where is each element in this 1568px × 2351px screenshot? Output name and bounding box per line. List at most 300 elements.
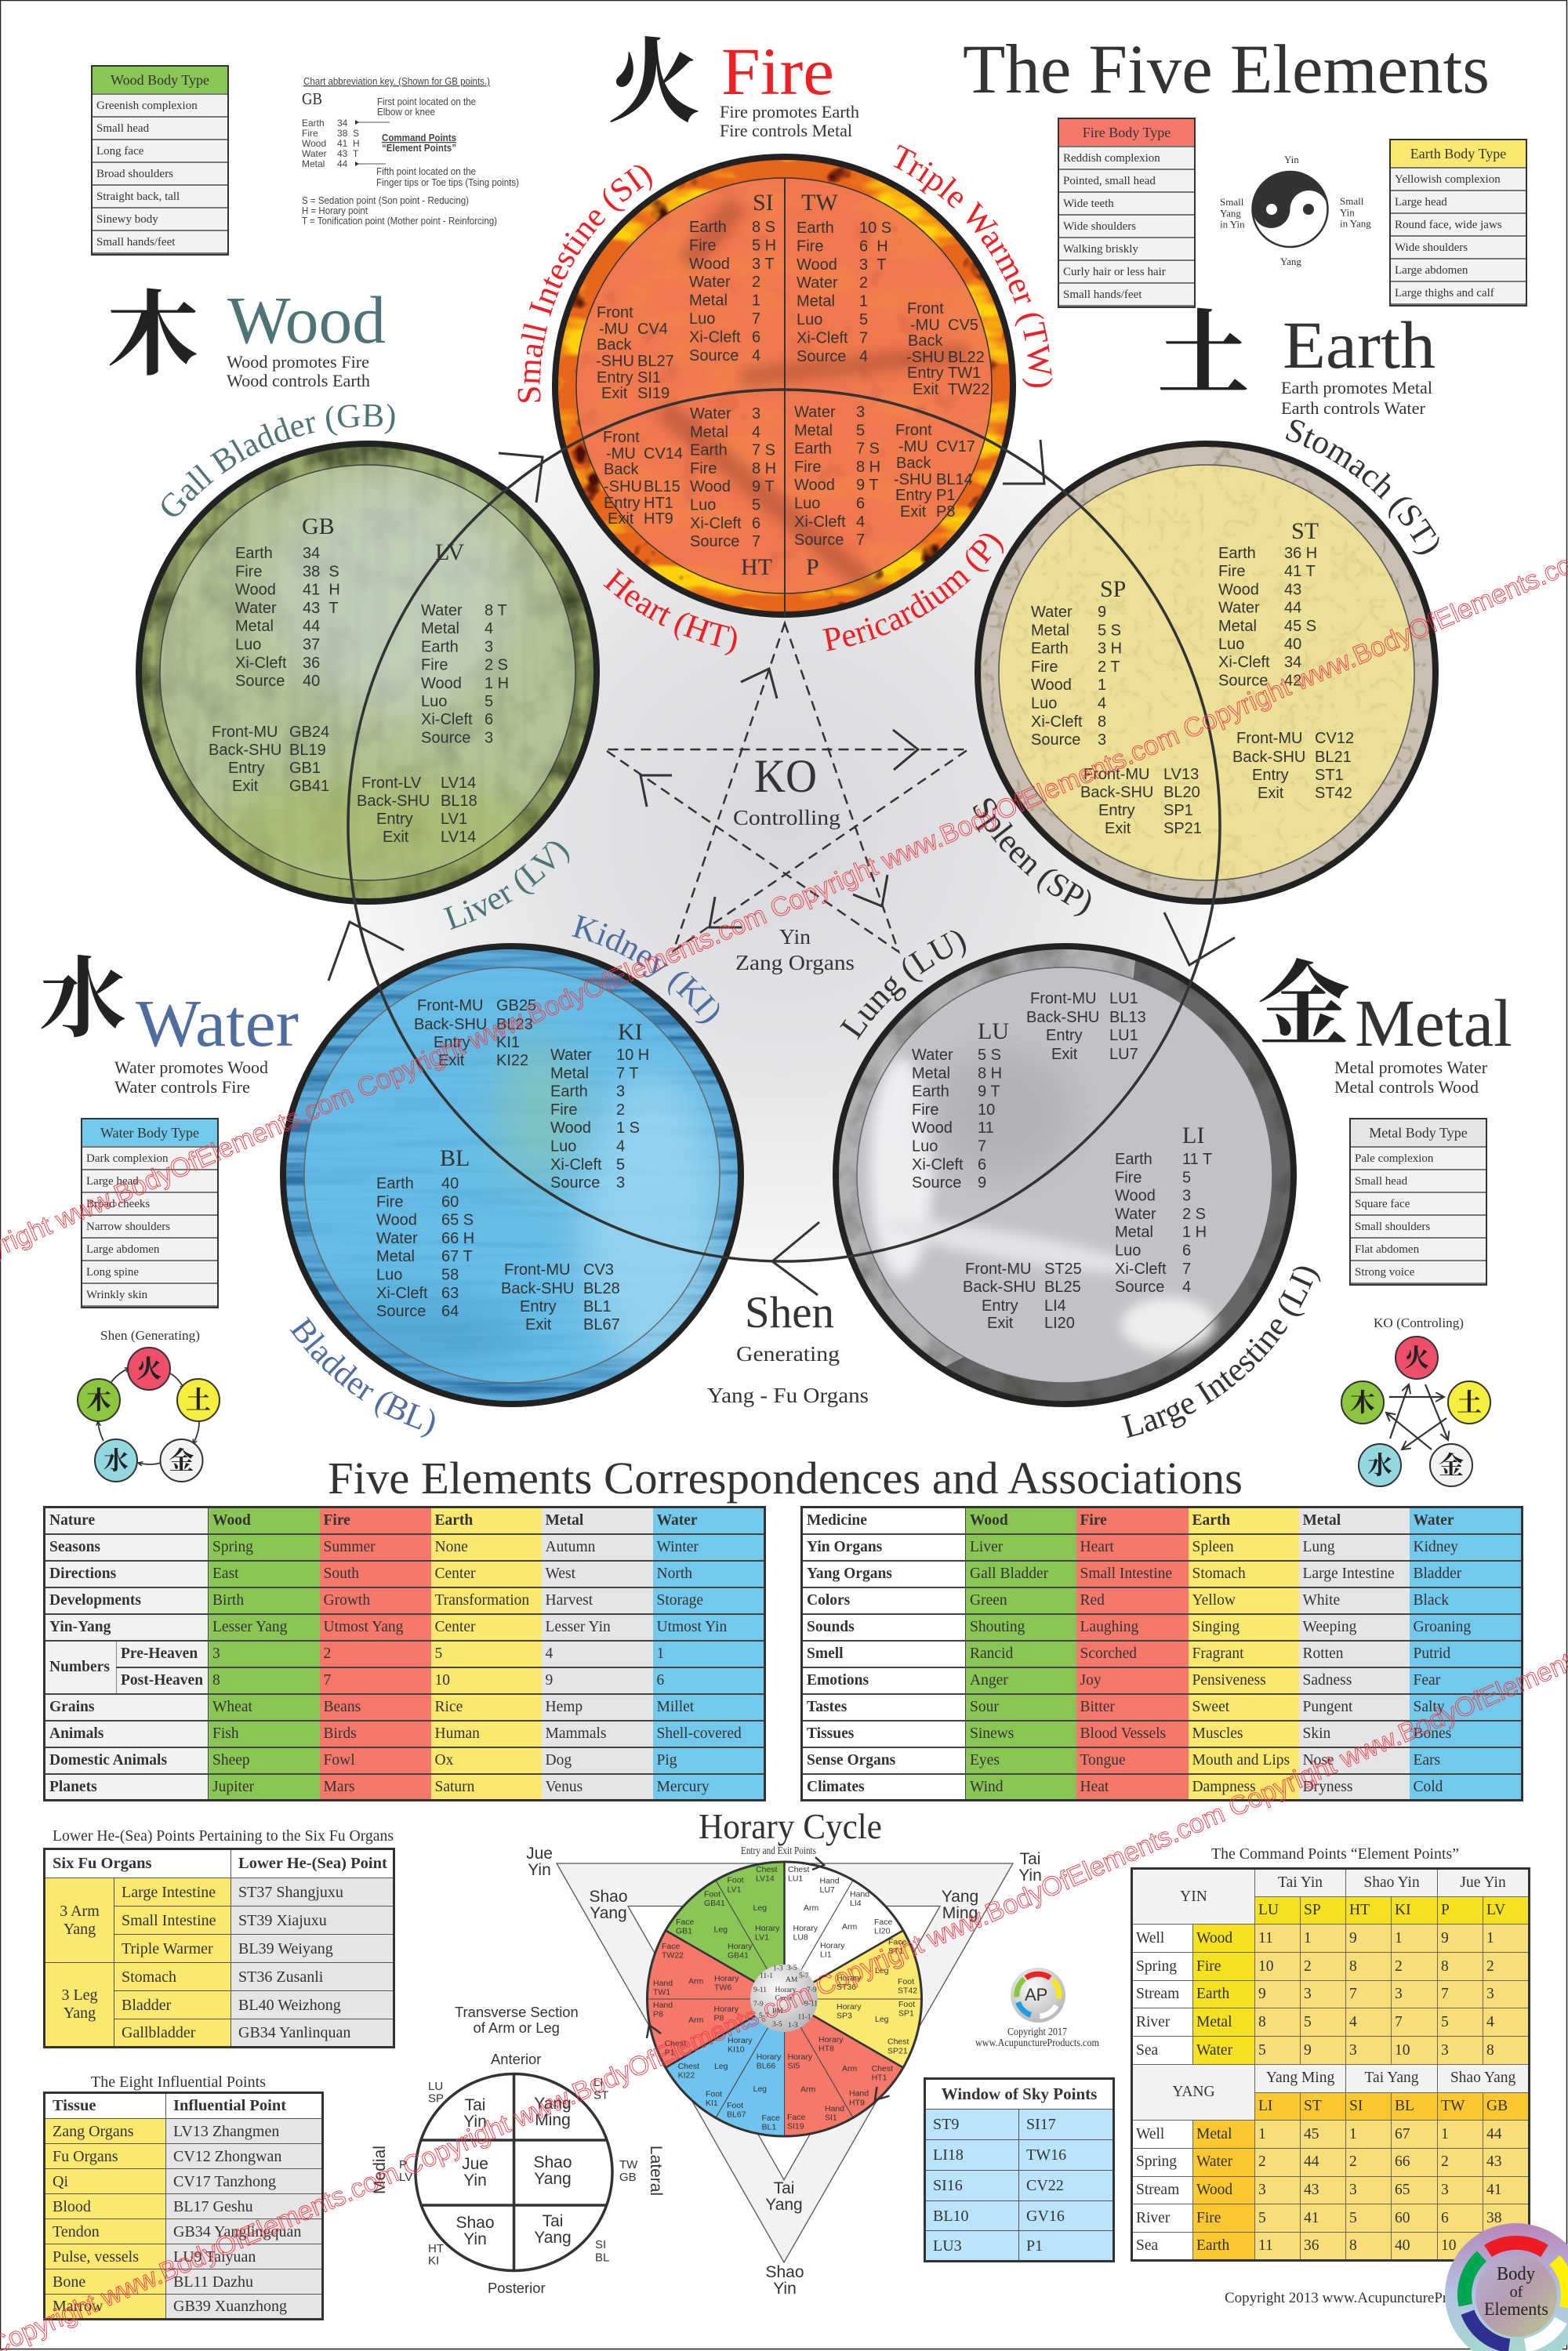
diagram: horary cycle wheel and triangles: Foot: [898, 1977, 914, 1986]
panel: Fire circle (SI, TW, HT, P): Entry: [895, 487, 932, 504]
panel: Water circle (KI, BL): Source: [376, 1303, 426, 1320]
panel: Wood circle (GB, LV): BL19: [289, 742, 326, 759]
panel: Wood circle (GB, LV): Exit: [383, 829, 409, 846]
diagram: horary cycle wheel and triangles: Ming: [942, 1904, 978, 1922]
table: medicine correspondences: Skin: [1303, 1725, 1330, 1742]
table: medicine correspondences: Shouting: [970, 1619, 1025, 1635]
table: medicine correspondences: Eyes: [970, 1752, 1000, 1769]
panel: Metal body type: [1349, 1118, 1487, 1286]
chart abbreviation key: Finger tips or Toe tips (Tsing points): [376, 176, 519, 188]
table: eight influential points: [43, 2092, 324, 2320]
panel: Fire circle (SI, TW, HT, P): Wood: [690, 478, 731, 495]
table: eight influential points: Blood: [53, 2198, 91, 2215]
panel: Water circle (KI, BL): Front-MU: [504, 1261, 570, 1279]
diagram: horary cycle wheel and triangles: BL66: [757, 2062, 775, 2071]
panel: Wood circle (GB, LV): Earth: [421, 638, 459, 655]
panel: Metal circle (LU, LI): Source: [1115, 1279, 1164, 1296]
table: eight influential points: BL17 Geshu: [173, 2198, 253, 2215]
table: nature correspondences: 9: [546, 1672, 553, 1689]
panel: Wood circle (GB, LV): Front-LV: [361, 775, 421, 792]
panel: Wood circle (GB, LV): Xi-Cleft: [235, 655, 287, 672]
panel: Earth circle (ST, SP): Front-MU: [1236, 730, 1302, 747]
table: medicine correspondences: Lung: [1303, 1539, 1335, 1555]
diagram: transverse section of arm or leg: Shao: [533, 2153, 572, 2171]
panel: Wood circle (GB, LV): Metal: [421, 620, 459, 637]
diagram: horary cycle wheel and triangles: Face: [662, 1942, 680, 1951]
diagram: horary cycle wheel and triangles: Horary: [714, 1974, 739, 1983]
panel: Metal circle (LU, LI): Back-SHU: [1026, 1009, 1099, 1026]
curved organ labels: Kidney (KI): [572, 915, 720, 1024]
panel: Earth circle (ST, SP): 42: [1284, 672, 1301, 689]
diagram: horary cycle wheel and triangles: Face: [888, 1938, 906, 1947]
table: medicine correspondences: Wood: [970, 1512, 1008, 1529]
table: medicine correspondences: Red: [1080, 1592, 1105, 1609]
curved organ labels: Small Intestine (SI): [517, 165, 652, 402]
table: command points: 2: [1349, 2153, 1357, 2170]
table: nature correspondences: West: [546, 1566, 575, 1582]
heading: Earth element: Earth controls Water: [1281, 398, 1426, 418]
table: command points: 41: [1304, 2210, 1319, 2226]
panel: Water circle (KI, BL): BL28: [583, 1280, 620, 1297]
ko controlling pentagram: [604, 623, 968, 952]
panel: Metal circle (LU, LI): BL13: [1109, 1009, 1146, 1026]
panel: Earth circle (ST, SP): Luo: [1218, 636, 1244, 653]
heading: correspondences and associations: Five Elements Correspondences and Associations: [328, 1453, 1243, 1504]
panel: Earth circle (ST, SP): 8: [1098, 713, 1106, 731]
diagram: horary cycle wheel and triangles: SI5: [788, 2062, 800, 2071]
diagram: KO controlling small star: 水: [1367, 1446, 1392, 1482]
panel: Wood circle (GB, LV): 2 S: [485, 657, 508, 674]
table: nature correspondences: Wheat: [212, 1699, 252, 1715]
diagram: horary cycle wheel and triangles: SI1: [825, 2113, 837, 2123]
panel: Fire body type: Fire Body Type: [1083, 125, 1171, 140]
panel: Wood circle (GB, LV): 34: [303, 545, 320, 562]
diagram: horary cycle wheel and triangles: Yang: [942, 1888, 978, 1906]
panel: Fire circle (SI, TW, HT, P): 4: [859, 348, 868, 365]
panel: Earth body type: Large head: [1395, 196, 1447, 209]
table: nature correspondences: Directions: [49, 1566, 116, 1582]
table: nature correspondences: Fowl: [324, 1752, 355, 1769]
table: eight influential points: LU9 Taiyuan: [173, 2248, 256, 2266]
diagram: horary cycle wheel and triangles: AM: [786, 1976, 798, 1984]
panel: Metal circle (LU, LI): Xi-Cleft: [1115, 1261, 1167, 1278]
diagram: horary cycle wheel and triangles: Arm: [800, 2085, 815, 2095]
table: command points: LU: [1258, 1902, 1279, 1918]
icon: yin yang symbol with labels: Yang: [1220, 207, 1241, 219]
chart abbreviation key: First point located on the: [377, 96, 476, 107]
panel: Fire circle (SI, TW, HT, P): 9 T: [856, 477, 879, 494]
diagram: horary cycle wheel and triangles: LU8: [793, 1933, 808, 1943]
table: command points: Stream: [1136, 1986, 1179, 2002]
diagram: horary cycle wheel and triangles: Yang: [765, 2196, 803, 2214]
panel: Wood circle (GB, LV): Xi-Cleft: [421, 711, 473, 728]
diagram: horary cycle wheel and triangles: 9-11: [753, 1986, 767, 1994]
table: medicine correspondences: Laughing: [1080, 1619, 1138, 1635]
table: command points: Stream: [1136, 2182, 1179, 2198]
curved organ labels: Spleen (SP): [973, 798, 1091, 916]
table: medicine correspondences: Heart: [1080, 1539, 1114, 1555]
table: medicine correspondences: Fear: [1413, 1672, 1440, 1689]
diagram: transverse section of arm or leg: GB: [619, 2171, 637, 2184]
heading: Wood element: 木: [107, 260, 199, 394]
panel: Wood circle (GB, LV): Luo: [235, 637, 261, 654]
table: medicine correspondences: Singing: [1192, 1619, 1240, 1635]
table: command points: Spring: [1136, 2153, 1177, 2170]
panel: Fire circle (SI, TW, HT, P): 5: [859, 311, 868, 328]
icon: yin yang symbol with labels: Small: [1340, 195, 1363, 207]
panel: Fire circle (SI, TW, HT, P): Luo: [689, 310, 715, 328]
panel: Water circle (KI, BL): BL67: [583, 1316, 620, 1333]
panel: Water circle (KI, BL): 66 H: [441, 1230, 474, 1247]
table: command points: GB: [1486, 2098, 1508, 2114]
table: nature correspondences: Center: [435, 1619, 475, 1635]
chart abbreviation key: T = Tonification point (Mother point - Reinforcing): [302, 215, 497, 227]
diagram: transverse section of arm or leg: Shao: [456, 2214, 495, 2232]
table: command points: Water: [1196, 2042, 1232, 2059]
diagram: horary cycle wheel and triangles: KI22: [678, 2071, 695, 2081]
panel: Fire body type: Curly hair or less hair: [1063, 266, 1166, 278]
diagram: Shen generating small cycle: Shen (Generating): [100, 1328, 200, 1343]
panel: Earth circle (ST, SP): Xi-Cleft: [1031, 713, 1083, 731]
table: window of sky points: LI18: [933, 2146, 964, 2164]
title: The Five Elements: The Five Elements: [963, 31, 1490, 108]
panel: Earth circle (ST, SP): 44: [1284, 600, 1301, 617]
heading: Water element: [39, 929, 299, 1097]
panel: Wood circle (GB, LV): 41 H: [303, 582, 340, 599]
table: nature correspondences: None: [435, 1539, 468, 1555]
diagram: horary cycle wheel and triangles: SI19: [787, 2122, 804, 2132]
table: medicine correspondences: Rotten: [1303, 1645, 1344, 1662]
caption: lower he-sea points: Lower He-(Sea) Points Pertaining to the Six Fu Organs: [53, 1827, 394, 1845]
panel: Metal circle (LU, LI): Earth: [1115, 1151, 1152, 1168]
panel: Water circle (KI, BL): Source: [550, 1174, 600, 1192]
table: nature correspondences: 10: [435, 1672, 450, 1689]
diagram: transverse section of arm or leg: BL: [595, 2251, 609, 2264]
panel: Fire circle (SI, TW, HT, P): Source: [689, 347, 739, 365]
panel: Wood circle (GB, LV): GB24: [289, 724, 329, 741]
panel: Water circle (KI, BL): Entry: [434, 1034, 470, 1051]
panel: Fire circle (SI, TW, HT, P): Front: [895, 422, 932, 439]
diagram: transverse section of arm or leg: ST: [593, 2088, 608, 2102]
table: lower he-sea points: Bladder: [122, 1996, 171, 2013]
diagram: horary cycle wheel and triangles: Horary: [755, 1924, 780, 1933]
diagram: horary cycle wheel and triangles: ST36: [837, 1983, 856, 1992]
table: medicine correspondences: Cold: [1413, 1778, 1443, 1795]
panel: Fire body type: Pointed, small head: [1063, 175, 1156, 187]
table: medicine correspondences: Sadness: [1303, 1672, 1352, 1689]
panel: Earth circle (ST, SP): Fire: [1031, 658, 1058, 676]
diagram: transverse section of arm or leg: of Arm or Leg: [474, 2019, 560, 2036]
panel: Water circle (KI, BL): [280, 943, 744, 1407]
table: window of sky points: LU3: [933, 2237, 962, 2255]
panel: Metal circle (LU, LI): Front-MU: [1030, 990, 1096, 1007]
table: command points: 2: [1441, 2153, 1449, 2170]
table: command points: 43: [1486, 2153, 1502, 2170]
panel: Fire circle (SI, TW, HT, P): Fire: [690, 460, 717, 477]
panel: Earth circle (ST, SP): Source: [1031, 731, 1080, 749]
diagram: horary cycle wheel and triangles: Face: [676, 1917, 694, 1927]
diagram: horary cycle wheel and triangles: Leg: [753, 1903, 767, 1913]
panel: Fire circle (SI, TW, HT, P): 3 T: [752, 256, 775, 273]
diagram: horary cycle wheel and triangles: Tai: [1020, 1850, 1040, 1868]
table: command points: 7: [1349, 1986, 1357, 2002]
table: nature correspondences: Dog: [546, 1752, 572, 1769]
table: nature correspondences: Seasons: [49, 1539, 100, 1555]
table: command points: 1: [1304, 1930, 1312, 1946]
diagram: horary cycle wheel and triangles: GB1: [676, 1927, 692, 1936]
table: lower he-sea points: ST37 Shangjuxu: [238, 1883, 343, 1900]
chart abbreviation key: Elbow or knee: [377, 106, 435, 118]
panel: Earth circle (ST, SP): 4: [1098, 695, 1106, 712]
table: medicine correspondences: Bitter: [1080, 1699, 1115, 1715]
panel: Water circle (KI, BL): Earth: [550, 1083, 588, 1101]
table: command points: 5: [1349, 2210, 1357, 2226]
panel: Metal circle (LU, LI): Entry: [1046, 1027, 1083, 1044]
chart abbreviation key: Metal: [302, 158, 325, 169]
heading: Fire element: Fire controls Metal: [720, 121, 852, 140]
panel: Wood circle (GB, LV): Metal: [235, 618, 274, 635]
diagram: horary cycle wheel and triangles: 11-1: [798, 2013, 811, 2021]
table: lower he-sea points: BL40 Weizhong: [238, 1996, 341, 2013]
diagram: horary cycle wheel and triangles: Foot: [706, 2090, 722, 2099]
table: medicine correspondences: Bladder: [1413, 1566, 1461, 1582]
panel: Fire circle (SI, TW, HT, P): BL14: [936, 471, 973, 488]
label: KO controlling, yin zang organs: [733, 750, 855, 974]
panel: Fire circle (SI, TW, HT, P): P: [806, 554, 819, 580]
panel: Fire circle (SI, TW, HT, P): BL15: [644, 478, 681, 495]
diagram: horary cycle wheel and triangles: SP1: [898, 2009, 914, 2019]
panel: Earth circle (ST, SP): SP1: [1163, 802, 1193, 819]
table: command points: 44: [1486, 2126, 1502, 2142]
table: nature correspondences: Mercury: [657, 1778, 710, 1795]
table: nature correspondences: Post-Heaven: [121, 1672, 203, 1689]
diagram: horary cycle wheel and triangles: LI4: [850, 1899, 862, 1908]
panel: Metal circle (LU, LI): 5 S: [978, 1047, 1001, 1064]
table: nature correspondences: 4: [546, 1645, 553, 1662]
diagram: transverse section of arm or leg: HT: [428, 2242, 444, 2255]
table: command points: Jue Yin: [1460, 1874, 1506, 1891]
panel: Earth circle (ST, SP): LV13: [1163, 766, 1199, 783]
curved organ labels: Large Intestine (LI): [1121, 1267, 1320, 1438]
diagram: horary cycle wheel and triangles: 1-3: [773, 1965, 783, 1972]
panel: Water circle (KI, BL): KI22: [496, 1052, 528, 1069]
diagram: horary cycle wheel and triangles: Horary: [713, 2005, 739, 2014]
panel: Earth circle (ST, SP): Back-SHU: [1080, 784, 1153, 801]
table: command points: LV: [1486, 1902, 1505, 1918]
diagram: horary cycle wheel and triangles: Foot: [898, 2000, 915, 2009]
diagram: horary cycle wheel and triangles: 11-1: [760, 1972, 773, 1980]
table: medicine correspondences: Earth: [1192, 1512, 1230, 1529]
table: command points: Metal: [1196, 2014, 1232, 2030]
diagram: Shen generating small cycle: 金: [169, 1441, 194, 1477]
table: nature correspondences: 6: [657, 1672, 664, 1689]
table: nature correspondences: Mars: [324, 1778, 355, 1795]
table: command points: 38: [1486, 2210, 1502, 2226]
diagram: horary cycle wheel and triangles: Arm: [804, 1903, 818, 1913]
panel: Fire body type: Wide teeth: [1063, 198, 1114, 210]
icon: yin yang symbol with labels: in Yin: [1220, 218, 1245, 230]
table: command points: 5: [1304, 2014, 1312, 2030]
table: nature correspondences: Planets: [49, 1778, 97, 1795]
table: medicine correspondences: Smell: [807, 1645, 844, 1662]
diagram: transverse section of arm or leg: [371, 2004, 665, 2296]
diagram: horary cycle wheel and triangles: LV1: [728, 1885, 742, 1894]
panel: Earth circle (ST, SP): Wood: [1218, 581, 1259, 598]
table: nature correspondences: 2: [324, 1645, 331, 1662]
table: medicine correspondences: Ears: [1413, 1752, 1440, 1769]
diagram: horary cycle wheel and triangles: 5-7: [799, 1972, 809, 1980]
panel: Earth circle (ST, SP): Xi-Cleft: [1218, 654, 1270, 671]
panel: Water circle (KI, BL): Back-SHU: [414, 1016, 487, 1033]
panel: Metal circle (LU, LI): Wood: [1115, 1188, 1156, 1205]
table: command points: 10: [1258, 1958, 1274, 1975]
panel: Fire circle (SI, TW, HT, P): Source: [690, 533, 739, 550]
panel: Fire circle (SI, TW, HT, P): -MU: [910, 317, 940, 334]
table: medicine correspondences: Gall Bladder: [970, 1566, 1048, 1582]
table: command points: ST: [1304, 2098, 1322, 2114]
diagram: horary cycle wheel and triangles: 3-5: [787, 1965, 797, 1972]
panel: Earth circle (ST, SP): Entry: [1252, 767, 1289, 784]
table: command points: 1: [1349, 2126, 1357, 2142]
table: medicine correspondences: Blood Vessels: [1080, 1725, 1166, 1742]
table: lower he-sea points: ST36 Zusanli: [238, 1968, 323, 1985]
diagram: transverse section of arm or leg: Yin: [463, 2113, 487, 2131]
table: command points: 41: [1486, 2182, 1502, 2198]
panel: Fire circle (SI, TW, HT, P): 8 H: [856, 459, 880, 476]
diagram: horary cycle wheel and triangles: HT8: [818, 2044, 834, 2054]
diagram: horary cycle wheel and triangles: HT9: [849, 2098, 865, 2107]
table: medicine correspondences: Tongue: [1080, 1752, 1126, 1769]
table: window of sky points: SI16: [933, 2177, 963, 2194]
diagram: horary cycle wheel and triangles: ST42: [898, 1986, 917, 1996]
panel: Earth circle (ST, SP): CV12: [1315, 730, 1354, 747]
diagram: horary cycle wheel and triangles: TW1: [653, 1988, 670, 1997]
diagram: transverse section of arm or leg: LV: [399, 2171, 412, 2184]
table: command points: 65: [1395, 2182, 1410, 2198]
table: command points: Well: [1136, 1930, 1164, 1946]
panel: Wood circle (GB, LV): LV14: [441, 829, 476, 846]
table: medicine correspondences: Emotions: [807, 1672, 869, 1689]
table: command points: 1: [1441, 2126, 1449, 2142]
panel: Fire circle (SI, TW, HT, P): P1: [936, 487, 955, 504]
panel: Water circle (KI, BL): 63: [441, 1285, 459, 1302]
panel: Fire circle (SI, TW, HT, P): Entry: [597, 369, 633, 386]
panel: Water circle (KI, BL): 5: [616, 1156, 625, 1174]
panel: Metal circle (LU, LI): Water: [1115, 1206, 1156, 1223]
table: medicine correspondences: Joy: [1080, 1672, 1102, 1689]
panel: Earth circle (ST, SP): 43: [1284, 581, 1301, 598]
table: command points: LI: [1258, 2098, 1272, 2114]
diagram: horary cycle wheel and triangles: 9-11: [804, 2001, 818, 2008]
panel: Fire circle (SI, TW, HT, P): Front: [907, 300, 944, 317]
table: command points: Water: [1196, 2153, 1232, 2170]
diagram: Shen generating small cycle: [78, 1328, 220, 1482]
panel: Earth circle (ST, SP): Front-MU: [1083, 766, 1149, 783]
panel: Water circle (KI, BL): BL23: [496, 1016, 533, 1033]
table: eight influential points: Qi: [53, 2173, 68, 2190]
diagram: horary cycle wheel and triangles: Horary: [775, 1986, 797, 1994]
panel: Fire circle (SI, TW, HT, P): Wood: [689, 256, 730, 273]
diagram: horary cycle wheel and triangles: Horary: [820, 1941, 845, 1950]
diagram: transverse section of arm or leg: Yang: [534, 2170, 572, 2188]
panel: Fire circle (SI, TW, HT, P): 2: [752, 274, 760, 291]
diagram: horary cycle wheel and triangles: Hand: [825, 2104, 844, 2113]
panel: Fire circle (SI, TW, HT, P): 7: [859, 329, 868, 346]
diagram: horary cycle wheel and triangles: ST1: [888, 1946, 903, 1956]
panel: Earth circle (ST, SP): 45 S: [1284, 618, 1316, 635]
table: nature correspondences: Pre-Heaven: [121, 1645, 198, 1662]
caption: command points: The Command Points “Element Points”: [1211, 1845, 1459, 1863]
table: medicine correspondences: Scorched: [1080, 1645, 1137, 1662]
diagram: horary cycle wheel and triangles: 3-5: [772, 2021, 782, 2029]
panel: Wood circle (GB, LV): Exit: [232, 778, 259, 795]
curved organ labels: [162, 144, 1439, 1438]
table: command points: 5: [1258, 2210, 1266, 2226]
panel: Wood circle (GB, LV): [133, 439, 604, 909]
panel: Metal circle (LU, LI): LI20: [1044, 1315, 1075, 1332]
table: nature correspondences: Millet: [657, 1699, 694, 1715]
panel: Water body type: Broad cheeks: [86, 1198, 150, 1210]
panel: Fire circle (SI, TW, HT, P): -SHU: [906, 349, 945, 366]
panel: Earth circle (ST, SP): 41 T: [1284, 563, 1316, 580]
table: command points: 10: [1441, 2237, 1457, 2254]
diagram: horary cycle wheel and triangles: Chest: [756, 1865, 777, 1874]
diagram: horary cycle wheel and triangles: Chest: [678, 2062, 699, 2071]
panel: Fire body type: Walking briskly: [1063, 243, 1138, 256]
table: command points: 2: [1395, 1958, 1403, 1975]
panel: Metal circle (LU, LI): Exit: [1051, 1046, 1078, 1063]
panel: Metal circle (LU, LI): 3: [1182, 1188, 1191, 1205]
table: medicine correspondences: Medicine: [807, 1512, 867, 1529]
icon: AcupunctureProducts logo and copyright: AP: [1025, 1985, 1047, 2005]
table: command points: 2: [1258, 2153, 1266, 2170]
panel: Fire circle (SI, TW, HT, P): BL27: [637, 353, 674, 370]
panel: Fire circle (SI, TW, HT, P): Luo: [797, 311, 822, 328]
table: medicine correspondences: Bones: [1413, 1725, 1451, 1742]
panel: Fire circle (SI, TW, HT, P): 5: [752, 497, 760, 514]
table: nature correspondences: Fire: [324, 1512, 350, 1529]
table: nature correspondences: Center: [435, 1566, 475, 1582]
table: command points: 8: [1349, 2237, 1357, 2254]
heading: Earth element: Earth promotes Metal: [1281, 378, 1432, 397]
panel: Earth body type: [1389, 139, 1527, 307]
table: lower he-sea points: Lower He-(Sea) Point: [238, 1855, 387, 1872]
panel: Fire circle (SI, TW, HT, P): Entry: [907, 365, 944, 382]
diagram: Shen generating small cycle: 木: [86, 1380, 111, 1417]
panel: Metal circle (LU, LI): LU1: [1109, 1027, 1138, 1044]
table: command points: Tai Yin: [1278, 1874, 1323, 1891]
table: command points: YIN: [1180, 1888, 1207, 1905]
table: command points: 3: [1486, 1986, 1494, 2002]
panel: Fire circle (SI, TW, HT, P): Exit: [913, 381, 939, 398]
chart abbreviation key: Command Points: [382, 132, 456, 143]
panel: Wood body type: Small hands/feet: [96, 236, 175, 249]
table: nature correspondences: Grains: [49, 1699, 94, 1715]
panel: Water circle (KI, BL): Wood: [550, 1119, 591, 1137]
panel: Fire circle (SI, TW, HT, P): 7: [752, 533, 760, 550]
diagram: transverse section of arm or leg: Yin: [463, 2171, 487, 2190]
table: command points: Yang Ming: [1266, 2070, 1334, 2086]
panel: Wood circle (GB, LV): Entry: [376, 811, 413, 828]
curved organ labels: Heart (HT): [603, 568, 737, 655]
panel: Earth body type: Wide shoulders: [1395, 241, 1468, 254]
panel: Water circle (KI, BL): Entry: [520, 1298, 557, 1315]
table: nature correspondences: Utmost Yang: [324, 1619, 403, 1635]
panel: Metal circle (LU, LI): [827, 941, 1302, 1411]
panel: Wood body type: Wood Body Type: [111, 72, 209, 88]
diagram: transverse section of arm or leg: Lateral: [647, 2146, 665, 2196]
panel: Metal circle (LU, LI): ST25: [1044, 1261, 1082, 1278]
